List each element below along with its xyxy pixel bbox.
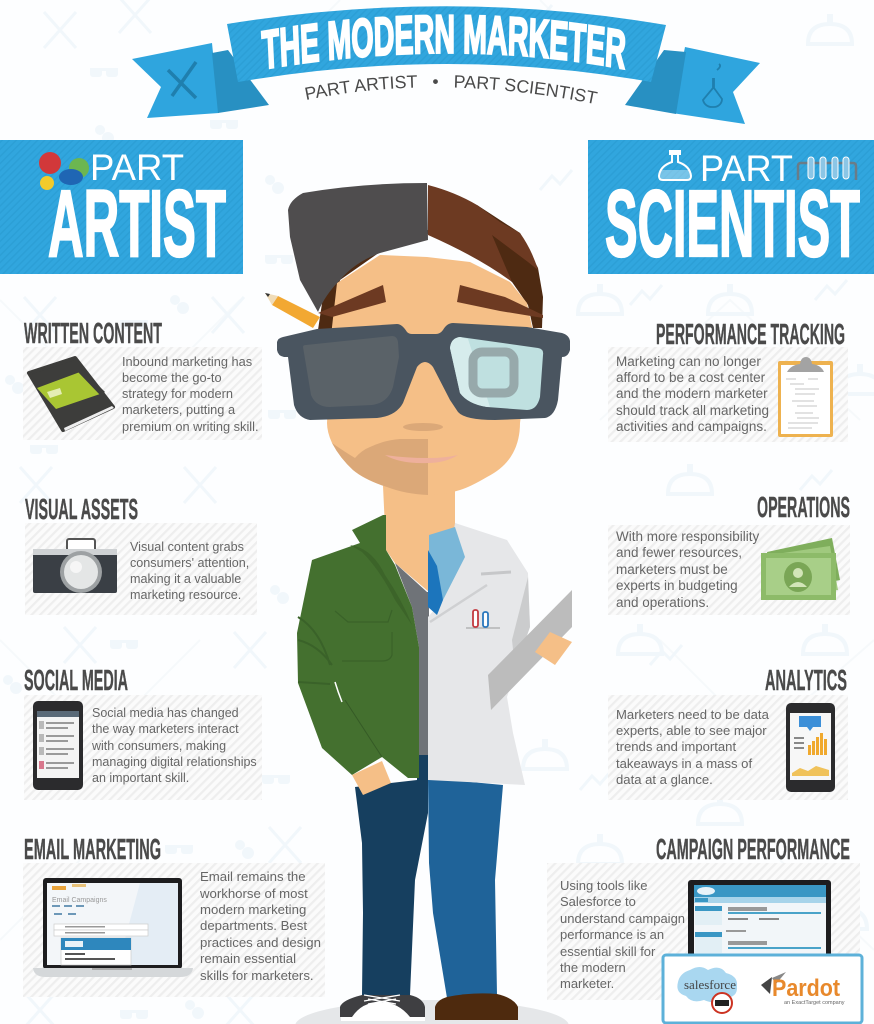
body text: essential skill for [560, 944, 656, 959]
section: analytics [608, 665, 848, 800]
body text: the way marketers interact [92, 722, 239, 736]
panel: part artist header [0, 140, 243, 277]
t-shirt [395, 563, 429, 755]
body text: Inbound marketing has [122, 354, 252, 369]
body text: managing digital relationships [92, 755, 257, 769]
logo: salesforce: salesforce [684, 977, 736, 992]
body text: afford to be a cost center [616, 370, 766, 385]
logo: pardot: an ExactTarget company [784, 1000, 845, 1006]
text panel [25, 523, 257, 615]
body text: Visual content grabs [130, 540, 244, 554]
body text: Salesforce to [560, 894, 636, 909]
icon: phone with charts [786, 703, 835, 792]
body text: practices and design [200, 935, 321, 950]
text panel [608, 347, 848, 442]
title text: THE MODERN MARKETER [260, 14, 626, 70]
text panel [23, 863, 325, 997]
eyebrows [318, 285, 543, 318]
section: social media: SOCIAL MEDIA [24, 665, 128, 697]
text panel [608, 695, 848, 800]
left hand in pocket [352, 761, 391, 795]
body text: marketer. [560, 976, 614, 991]
character ground shadow [295, 1000, 569, 1024]
body text: an important skill. [92, 771, 189, 785]
nose shadow [403, 423, 443, 431]
banner left tail [132, 43, 219, 118]
body text: strategy for modern [122, 386, 233, 401]
lab coat [428, 523, 530, 785]
panel: part scientist header [588, 140, 874, 277]
icon: flask [703, 64, 722, 107]
tie [428, 550, 443, 615]
body text: become the go-to [122, 370, 222, 385]
pencil [265, 293, 320, 328]
glasses [277, 323, 570, 420]
body text: remain essential [200, 951, 296, 966]
part label: PART [90, 147, 184, 188]
body text: Using tools like [560, 878, 647, 893]
eye ring [473, 352, 514, 393]
body text: With more responsibility [616, 529, 760, 544]
icon: phone [33, 701, 83, 790]
banner main band [227, 6, 666, 82]
body text: marketing resource. [130, 588, 241, 602]
body text: activities and campaigns. [616, 419, 767, 434]
icon: laptop [33, 878, 193, 977]
neck [383, 486, 455, 592]
text panel [547, 863, 860, 1000]
body text: consumers' attention, [130, 556, 249, 570]
logo: pardot: Pardot [772, 975, 840, 1002]
face [327, 255, 532, 495]
body text: and operations. [616, 595, 709, 610]
body text: Marketing can no longer [616, 354, 761, 369]
icon: clipboard [778, 357, 833, 437]
body text: departments. Best [200, 918, 307, 933]
right shoe [435, 993, 518, 1020]
body text: should track all marketing [616, 403, 769, 418]
body text: and the modern marketer [616, 386, 768, 401]
body text: making it a valuable [130, 572, 241, 586]
body text: Email remains the [200, 869, 306, 884]
part label: PART [700, 148, 793, 189]
hair underlayer [318, 205, 543, 330]
section: written content [23, 318, 262, 440]
section: social media [24, 665, 262, 800]
body text: workhorse of most [199, 886, 308, 901]
icon: camera [33, 539, 117, 593]
clipboard [488, 590, 572, 710]
title banner [132, 6, 760, 124]
icon: beaker [659, 151, 691, 180]
right lens [450, 337, 543, 410]
section: campaign performance [547, 834, 860, 1000]
body text: experts, able to see major [616, 723, 767, 738]
body text: marketers must be [616, 562, 728, 577]
icon: crossed pencil and brush [168, 62, 196, 98]
section: visual assets [25, 494, 257, 615]
character illustration [265, 183, 572, 1021]
right hand [535, 632, 572, 665]
body text: marketers, putting a [122, 402, 236, 417]
body text: and fewer resources, [616, 545, 742, 560]
body text: skills for marketers. [200, 968, 314, 983]
body text: the modern [560, 960, 626, 975]
panel: logos box [663, 955, 862, 1023]
body text: Marketers need to be data [616, 707, 770, 722]
body text: performance is an [560, 927, 664, 942]
left leg [355, 753, 428, 995]
no software stamp [712, 993, 732, 1013]
icon: paint splats [39, 152, 89, 190]
banner right fold [625, 50, 686, 114]
mouth [385, 455, 458, 463]
logo: salesforce [677, 967, 737, 1013]
right leg [428, 778, 503, 998]
green jacket [297, 515, 419, 778]
section: performance tracking [608, 319, 848, 442]
icon: notebook [29, 358, 114, 431]
body text: takeaways in a mass of [616, 756, 752, 771]
artist label: ARTIST [48, 171, 226, 277]
shirt collar [429, 527, 465, 600]
logo: pardot [761, 972, 845, 1006]
beard [332, 439, 428, 495]
text panel [608, 525, 850, 615]
body text: with consumers, making [91, 739, 226, 753]
section: visual assets: VISUAL ASSETS [25, 494, 138, 526]
section: written content: WRITTEN CONTENT [24, 318, 162, 350]
text panel [24, 695, 262, 800]
body text: understand campaign [560, 911, 685, 926]
body text: trends and important [616, 739, 736, 754]
brown hair [428, 185, 538, 282]
icon: money [761, 538, 840, 600]
section: email marketing [23, 834, 325, 997]
left shoe [340, 995, 425, 1021]
body text: data at a glance. [616, 772, 713, 787]
section: operations [608, 492, 850, 615]
body text: experts in budgeting [616, 578, 738, 593]
left dark lens [303, 336, 399, 407]
banner left fold [212, 50, 269, 113]
grey cap hair [288, 183, 428, 312]
icon: laptop [688, 880, 831, 960]
body text: modern marketing [200, 902, 306, 917]
heading: EMAIL MARKETING [24, 834, 161, 866]
body text: premium on writing skill. [122, 419, 259, 434]
subtitle: PART ARTIST • PART SCIENTIST [305, 75, 598, 104]
banner right tail [672, 47, 760, 124]
text panel [23, 347, 262, 440]
body text: Social media has changed [92, 706, 239, 720]
icon: test tubes [798, 157, 856, 180]
icon: laptop: Email Campaigns [52, 897, 107, 904]
